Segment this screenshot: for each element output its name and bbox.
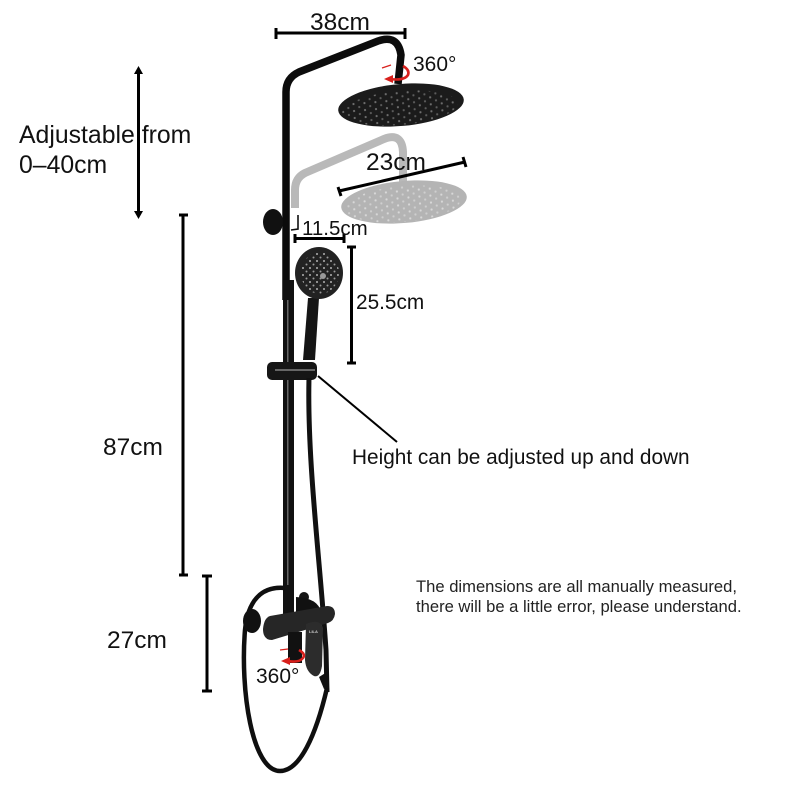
dimension: 11.5cm: 11.5cm <box>302 217 368 240</box>
dimension: 87cm <box>103 215 188 575</box>
dimension: 25.5cm <box>347 247 424 363</box>
small hook <box>291 215 298 230</box>
dimension: 38cm <box>276 9 405 39</box>
dimension: 27cm: 27cm <box>107 627 167 654</box>
dimension: 27cm <box>107 576 212 691</box>
dimension: 38cm: 38cm <box>310 9 370 36</box>
wall bracket <box>263 209 283 235</box>
dimension: 23cm: 23cm <box>366 149 426 176</box>
dimension: 87cm: 87cm <box>103 434 163 461</box>
leader line <box>318 376 397 442</box>
dimension: 23cm <box>338 149 466 196</box>
label: top 360 degrees: 360° <box>413 53 456 76</box>
note: measurement disclaimer: The dimensions are all manually measured, <box>416 577 737 596</box>
mixer valve <box>243 592 335 689</box>
mixer valve: LILA <box>309 629 318 634</box>
dimension: 25.5cm: 25.5cm <box>356 291 424 314</box>
dimension: adjustable height arrow <box>134 66 143 219</box>
hand shower <box>295 247 343 360</box>
ghost lowered shower position <box>295 137 469 228</box>
label: adjustable from 0-40cm: 0–40cm <box>19 152 107 179</box>
label: bottom 360 degrees: 360° <box>256 665 299 688</box>
icon: bottom rotation arrow <box>280 649 304 665</box>
note: measurement disclaimer: there will be a little error, please understand. <box>416 597 742 616</box>
icon: top rotation arrow <box>382 65 408 83</box>
hose <box>309 378 327 692</box>
slider bracket <box>267 362 317 380</box>
lower hose loop <box>244 588 327 771</box>
callout: height adjustment: Height can be adjusted up and down <box>352 446 690 469</box>
rain shower head <box>336 79 466 131</box>
label: adjustable from 0-40cm: Adjustable from <box>19 122 191 149</box>
shower rail and arm <box>283 39 401 620</box>
